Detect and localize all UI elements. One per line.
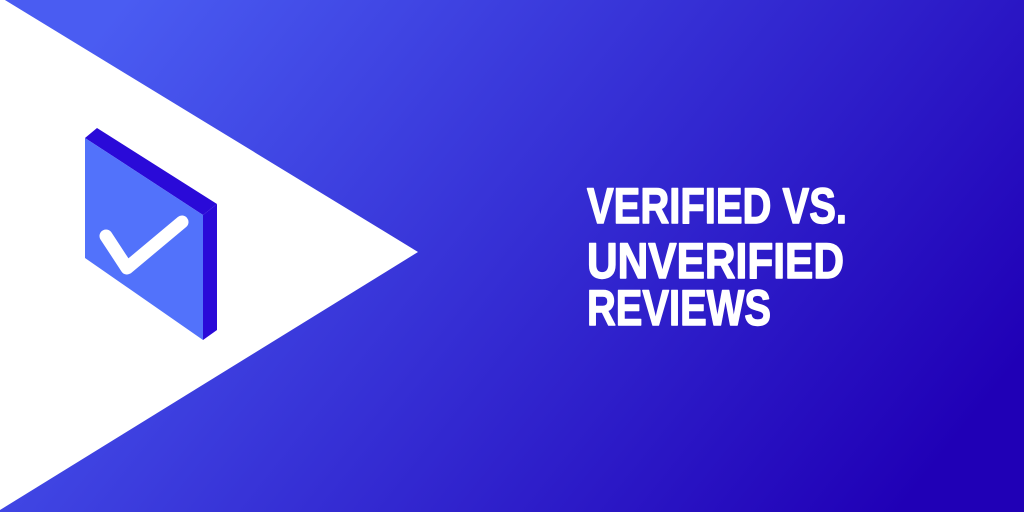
title (587, 178, 847, 336)
icon: checkbox (85, 128, 217, 340)
white triangle (0, 0, 418, 510)
title: VERIFIED VS. (587, 178, 847, 234)
title: UNVERIFIED (587, 233, 844, 289)
title: REVIEWS (587, 280, 771, 336)
